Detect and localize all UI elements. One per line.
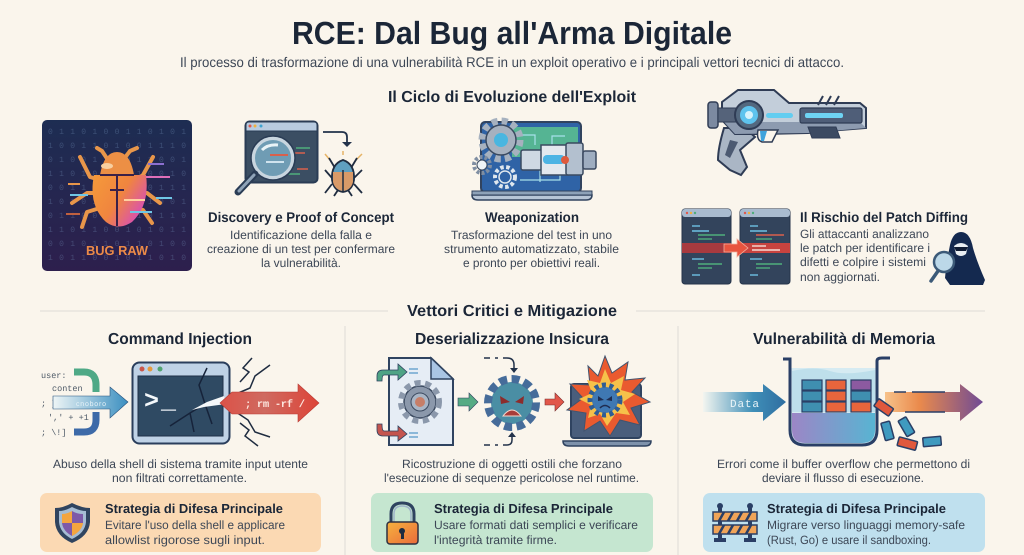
callout: defence shell: allowlist rigorose sugli input. [105,533,265,547]
panel: insecure deserialization [371,331,653,552]
description: memory: Errori come il buffer overflow che permettono di [717,457,970,471]
heading: memory: Vulnerabilità di Memoria [753,331,935,348]
callout: defence formats: Usare formati dati semplici e verificare [434,518,638,532]
panel: bug raw tile: 0 0 1 1 0 1 0 0 1 0 1 1 1 [48,184,186,193]
icon: shield [55,503,90,543]
icon: padlock [387,503,418,544]
icon: command injection into cracked terminal [41,358,319,446]
callout: defence shell [40,493,321,552]
label: bug raw: BUG RAW [86,243,149,258]
text block: discovery [207,209,395,270]
panel: bug raw tile: 0 1 1 0 1 0 0 1 1 0 1 0 1 [48,128,186,137]
icon: buffer overflow: Data [730,399,759,411]
body: weaponization [444,228,619,270]
icon: barrier [713,503,757,542]
subtitle: Il processo di trasformazione di una vulnerabilità RCE in un exploit operativo e i principali vettori tecnici di attacco. [180,54,844,70]
heading: deserialization: Deserializzazione Insicura [415,331,609,348]
callout: defence memory-safe: Strategia di Difesa Principale [767,501,946,516]
description: deserialization: l'esecuzione di sequenze pericolose nel runtime. [384,471,639,485]
heading: command injection: Command Injection [108,331,252,348]
body: patch diffing: non aggiornati. [800,270,880,284]
icon: command injection into cracked terminal: conten [52,384,83,394]
callout: defence memory-safe: Migrare verso linguaggi memory-safe [767,518,965,532]
icon: futuristic gun [708,90,866,175]
description: command injection: Abuso della shell di sistema tramite input utente [53,457,308,471]
panel: bug raw tile: 0 1 1 0 0 1 1 0 1 0 1 1 0 [48,212,186,221]
icon: laptop with gears and cannon [472,121,596,200]
icon: command injection into cracked terminal: ; rm -rf / [245,399,305,411]
description: memory [717,457,970,485]
body: discovery: la vulnerabilità. [261,256,341,270]
icon: command injection into cracked terminal: user: [41,371,67,381]
body: weaponization: strumento automatizzato, stabile [444,242,619,256]
icon: hooded hacker [931,232,985,285]
icon: command injection into cracked terminal: >_ [144,387,177,416]
callout: defence formats: Strategia di Difesa Principale [434,501,613,516]
body: patch diffing [800,227,930,284]
description: memory: deviare il flusso di esecuzione. [762,471,924,485]
body: patch diffing: Gli attaccanti analizzano [800,227,929,241]
panel: memory vulnerability [703,331,985,552]
heading: weaponization: Weaponization [485,209,579,225]
body: patch diffing: difetti e colpire i sistemi [800,255,926,269]
callout: defence shell: Evitare l'uso della shell e applicare [105,518,285,532]
panel: bug raw tile: 0 0 1 0 1 1 0 1 1 0 1 0 0 [48,240,186,249]
heading: discovery: Discovery e Proof of Concept [208,209,394,225]
panel: bug raw tile: 0 1 0 0 1 1 1 0 1 1 0 0 1 [48,156,186,165]
section heading: exploit cycle: Il Ciclo di Evoluzione dell'Exploit [388,89,637,106]
body: discovery [207,228,395,270]
section heading: critical vectors: Vettori Critici e Mitigazione [407,303,617,320]
icon: patch diff code windows [682,209,790,284]
panel: bug raw tile: 1 1 0 1 1 0 0 1 0 1 0 1 1 [48,226,186,235]
icon: code window with magnifier and bug [238,122,362,196]
panel: bug raw tile [42,120,192,271]
callout: defence memory-safe [703,493,985,552]
body: discovery: creazione di un test per confermare [207,242,395,256]
panel: bug raw tile: 1 1 0 1 0 1 0 1 1 0 0 1 0 [48,170,186,179]
description: command injection [53,457,308,485]
icon: command injection into cracked terminal: ',' + +1 [48,413,89,423]
panel: bug raw tile: 1 0 0 1 1 0 1 0 0 1 1 1 0 [48,142,186,151]
description: deserialization: Ricostruzione di oggetti ostili che forzano [402,457,622,471]
callout: defence formats: l'integrità tramite firme. [434,533,557,547]
body: discovery: Identificazione della falla e [230,228,372,242]
callout: defence memory-safe: (Rust, Go) e usare il sandboxing. [767,533,931,547]
icon: command injection into cracked terminal: ; ] [41,399,56,409]
icon: orange bug [72,148,160,227]
text block: patch diffing [800,209,968,284]
callout: defence shell: Strategia di Difesa Principale [105,501,283,516]
heading: patch diffing: Il Rischio del Patch Diffing [800,209,968,225]
icon: deserialization flow [377,356,651,446]
panel: command injection [40,331,321,552]
body: patch diffing: le patch per identificare i [800,241,930,255]
body: weaponization: Trasformazione del test in uno [451,228,612,242]
icon: buffer overflow [703,358,983,450]
callout: defence formats [371,493,653,552]
text block: weaponization [444,209,619,270]
description: deserialization [384,457,639,485]
title: RCE: Dal Bug all'Arma Digitale [292,15,732,51]
panel: bug raw tile: 1 0 1 1 0 0 1 0 1 1 0 1 0 [48,254,186,263]
body: weaponization: e pronto per obiettivi reali. [463,256,600,270]
panel: bug raw tile: 1 0 1 0 1 0 1 1 0 1 0 0 1 [48,198,186,207]
icon: command injection into cracked terminal: cnoboro [76,400,106,408]
icon: command injection into cracked terminal: ; \!] [41,428,67,438]
description: command injection: non filtrati correttamente. [112,471,247,485]
divider [40,311,985,555]
